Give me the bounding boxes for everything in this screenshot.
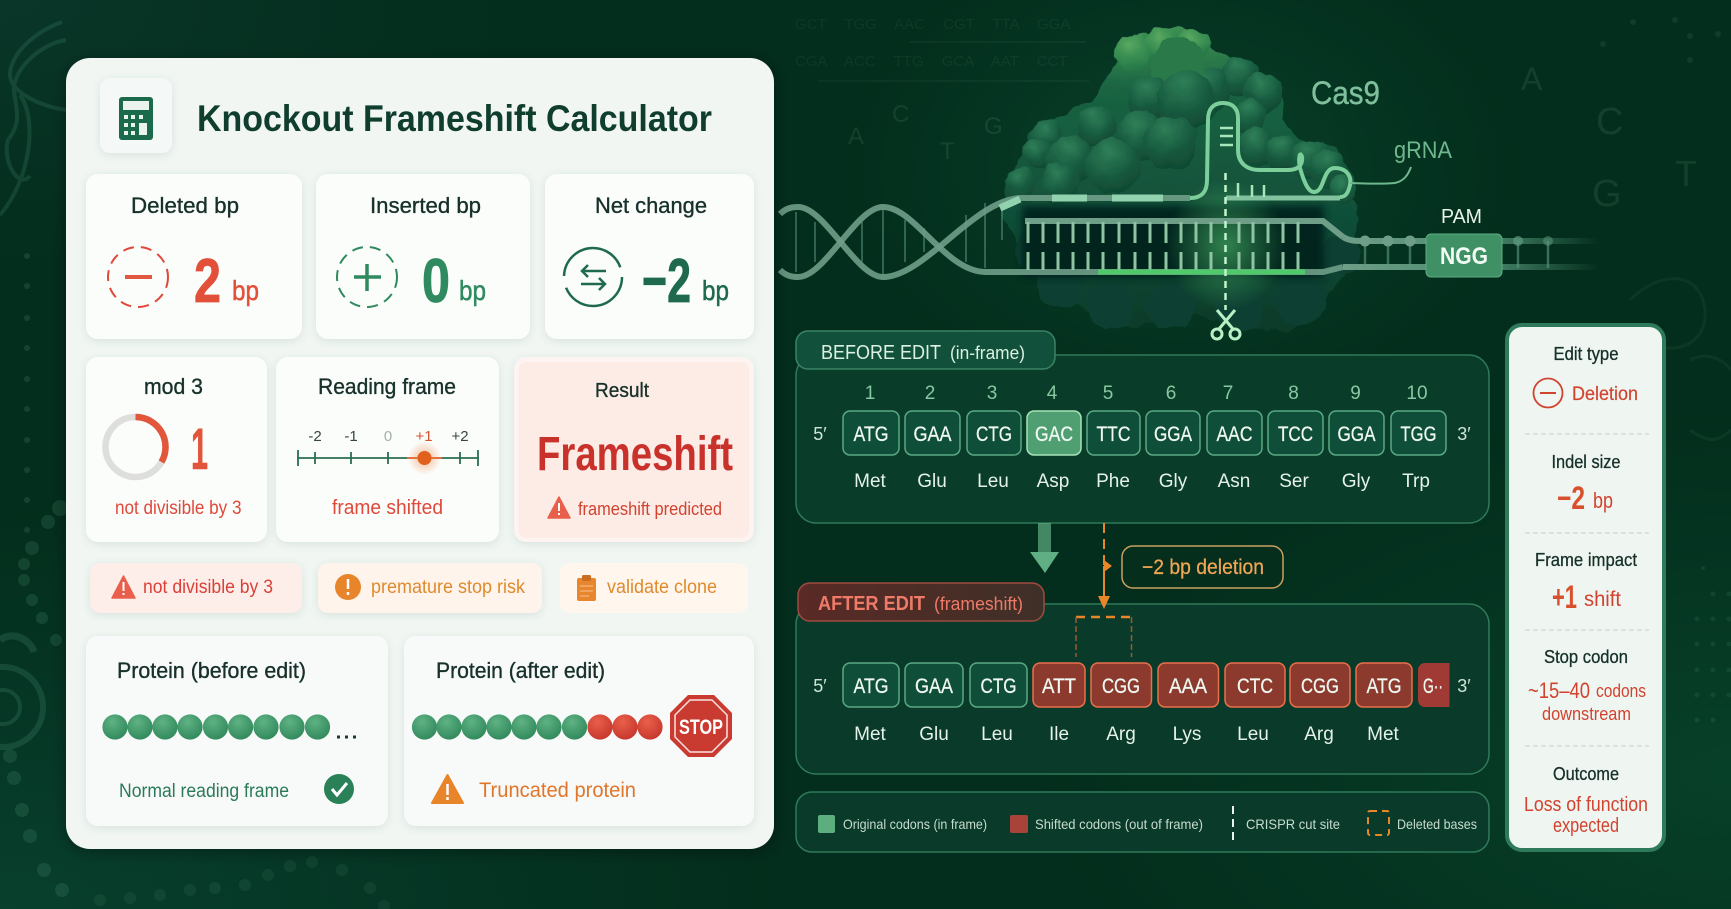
stop codon: ~15–40	[1528, 678, 1590, 703]
faint helix right	[1630, 279, 1731, 439]
codon numbers: 4	[1047, 383, 1058, 404]
amino acids: Leu	[977, 471, 1009, 492]
chip: not divisible by 3: not divisible by 3	[143, 577, 273, 598]
faint helix top left	[0, 22, 66, 215]
amino acids	[854, 724, 1400, 745]
panel: after edit	[796, 583, 1489, 774]
amino acids: Met	[854, 724, 887, 745]
panel: before edit: 5′	[813, 424, 827, 444]
codon numbers: 6	[1166, 383, 1176, 404]
card: result: Result	[595, 380, 649, 402]
stop codon: Stop codon	[1544, 647, 1628, 667]
base pair rungs	[1028, 222, 1298, 270]
card: deleted bp: Deleted bp	[131, 193, 239, 218]
arrow: before to after	[1030, 523, 1059, 573]
card: deleted bp	[86, 174, 302, 339]
card: result	[514, 357, 754, 542]
shifted codons key: Shifted codons (out of frame)	[1035, 816, 1203, 832]
original codons key	[818, 815, 987, 833]
cut site key	[1233, 806, 1340, 840]
codon numbers: 5	[1103, 383, 1113, 404]
background codon text: C	[1596, 101, 1623, 143]
amino acids: Arg	[1106, 724, 1136, 745]
background codon text: G	[1592, 173, 1622, 215]
card: reading frame: -1	[344, 428, 358, 445]
card: protein after edit: Truncated protein	[479, 779, 636, 802]
amino acids: Arg	[1304, 724, 1334, 745]
deleted bases marker	[1076, 617, 1132, 657]
codon numbers: 7	[1223, 383, 1233, 404]
codon row	[843, 411, 1446, 455]
codon row: GAA	[914, 423, 952, 446]
outcome: expected	[1553, 815, 1619, 837]
codon row: GGA	[1338, 423, 1376, 446]
right upper strand	[1226, 196, 1340, 200]
faint bead wave bottom	[94, 856, 390, 909]
card: net change: Net change	[595, 193, 707, 218]
codon numbers: 9	[1350, 383, 1361, 404]
tab: after edit: (frameshift)	[934, 594, 1023, 614]
card: inserted bp: 0	[422, 247, 450, 316]
gRNA	[1190, 103, 1411, 198]
deleted bases key: Deleted bases	[1397, 816, 1477, 832]
codon row: CTG	[980, 675, 1016, 698]
card: inserted bp	[316, 174, 530, 339]
legend	[796, 792, 1489, 852]
amino acids: Lys	[1173, 724, 1201, 745]
codon numbers: 1	[865, 383, 875, 404]
card: reading frame	[276, 357, 499, 542]
stop codon: downstream	[1542, 704, 1631, 724]
amino acids: Ile	[1049, 724, 1069, 745]
indel size: bp	[1593, 488, 1613, 513]
helix rungs	[796, 200, 1002, 274]
amino acids: Phe	[1096, 471, 1130, 492]
codon row: G··	[1423, 675, 1443, 698]
background codon text: A	[1521, 61, 1543, 97]
beads	[412, 714, 663, 740]
icon: stop sign: STOP	[679, 716, 723, 739]
tab: before edit: BEFORE EDIT	[821, 342, 941, 364]
outcome: Outcome	[1553, 764, 1619, 784]
codon row: CGG	[1102, 675, 1140, 698]
label: gRNA: gRNA	[1394, 137, 1452, 164]
amino acids: Glu	[917, 471, 947, 492]
left strand B and lower strand	[780, 207, 1343, 277]
background codon text	[795, 16, 1697, 215]
background codon text: A	[848, 123, 864, 150]
callout: -2 bp deletion	[1122, 546, 1283, 588]
PAM box NGG: NGG	[1440, 243, 1488, 270]
Cas9 protein	[1003, 27, 1360, 333]
codon row: TCC	[1278, 423, 1313, 446]
title: Knockout Frameshift Calculator	[197, 98, 712, 139]
codon row: GAC	[1035, 423, 1073, 446]
label: PAM: PAM	[1441, 206, 1482, 228]
card: reading frame: Reading frame	[318, 374, 456, 399]
arrow: deletion site	[1098, 523, 1112, 609]
card: reading frame: 0	[384, 428, 392, 445]
label: Cas9: Cas9	[1311, 75, 1380, 111]
amino acids: Gly	[1159, 471, 1188, 492]
card: reading frame: +2	[451, 428, 469, 445]
chip: validate clone	[560, 563, 748, 613]
right stem rungs	[1365, 241, 1548, 268]
deleted bases key	[1368, 811, 1477, 835]
panel: after edit: 3′	[1457, 676, 1471, 696]
card: mod 3: mod 3	[144, 374, 203, 399]
card: result: frameshift predicted	[578, 499, 722, 519]
codon numbers	[865, 383, 1428, 404]
background codon text: G	[984, 113, 1003, 140]
icon: scissors	[1212, 310, 1240, 339]
background codon text: C	[892, 101, 909, 128]
frame impact: shift	[1584, 588, 1621, 611]
amino acids: Asn	[1218, 471, 1250, 492]
stop codon: codons	[1596, 681, 1646, 701]
codon numbers: 10	[1406, 383, 1428, 404]
codon row: ATT	[1042, 675, 1076, 698]
card: protein after edit: Protein (after edit)	[436, 658, 605, 683]
amino acids: Ser	[1279, 471, 1309, 492]
DNA duplex with Cas9 bubble	[780, 180, 1600, 310]
amino acids	[854, 471, 1430, 492]
background codon text: T	[940, 138, 955, 165]
panel: edit summary	[1507, 325, 1664, 850]
amino acids: Gly	[1342, 471, 1371, 492]
icon: warning	[548, 497, 570, 518]
tab: after edit: AFTER EDIT	[818, 593, 925, 615]
card: protein before edit: Protein (before edit)	[117, 658, 306, 683]
codon row: ATG	[854, 675, 888, 698]
codon row: GGA	[1154, 423, 1192, 446]
card: net change: bp	[702, 275, 729, 306]
bright highlighted strand	[1098, 270, 1305, 274]
background codon text: GCT TGG AAC CGT TTA GGA	[795, 16, 1070, 33]
frame impact: +1	[1552, 579, 1577, 615]
codon numbers: 8	[1288, 383, 1299, 404]
panel: after edit: 5′	[813, 676, 827, 696]
faint dot column	[24, 253, 30, 533]
codon row: CGG	[1301, 675, 1339, 698]
codon row: ATG	[1366, 675, 1402, 698]
outcome: Loss of function	[1524, 794, 1648, 816]
card: net change: −2	[642, 247, 691, 316]
amino acids: Glu	[919, 724, 949, 745]
icon: stop sign	[670, 695, 732, 757]
codon row: GAA	[915, 675, 953, 698]
codon numbers: 3	[987, 383, 997, 404]
card: inserted bp: bp	[459, 275, 486, 306]
codon numbers: 2	[925, 383, 935, 404]
codon row: CTG	[976, 423, 1012, 446]
edit type	[1534, 344, 1638, 408]
amino acids: Leu	[1237, 724, 1269, 745]
amino acids: Asp	[1037, 471, 1069, 492]
amino acids: Trp	[1402, 471, 1430, 492]
cut site key: CRISPR cut site	[1246, 816, 1340, 832]
faint dots right	[1600, 17, 1731, 722]
card: protein after edit	[404, 636, 754, 826]
indel size: −2	[1557, 480, 1585, 516]
codon row: AAC	[1216, 423, 1252, 446]
card: mod 3: 1	[191, 417, 208, 482]
faint circle left	[0, 636, 43, 747]
card: reading frame: frame shifted	[332, 497, 443, 519]
panel: before edit: 3′	[1457, 424, 1471, 444]
chip: not divisible by 3	[90, 563, 302, 613]
background codon text: T	[1675, 153, 1697, 194]
codon row: TTC	[1096, 423, 1130, 446]
card: protein before edit: Normal reading frame	[119, 781, 289, 802]
chip: premature stop risk: premature stop risk	[371, 577, 525, 598]
icon: warning	[432, 775, 463, 803]
original codons key: Original codons (in frame)	[843, 816, 987, 832]
tab: after edit	[798, 583, 1044, 621]
card: reading frame: -2	[308, 428, 322, 445]
upper strand highlights	[1000, 198, 1163, 208]
cut line	[1224, 173, 1227, 310]
chip: premature stop risk	[318, 563, 542, 613]
codon row: TGG	[1400, 423, 1436, 446]
faint bead chain left	[3, 500, 69, 897]
inner target strand	[1025, 221, 1343, 237]
card: protein before edit	[86, 636, 388, 826]
card: net change	[545, 174, 754, 339]
card: reading frame: +1	[415, 428, 433, 445]
background codon text: CGA ACC TTG GCA AAT CCT	[795, 53, 1068, 70]
indel size: Indel size	[1552, 452, 1620, 472]
frame impact: Frame impact	[1535, 550, 1637, 570]
frame impact	[1535, 550, 1637, 615]
chip: validate clone: validate clone	[607, 577, 717, 598]
card: inserted bp: Inserted bp	[370, 193, 481, 218]
amino acids: Met	[854, 471, 887, 492]
icon: calculator	[100, 78, 172, 153]
card: mod 3	[86, 357, 267, 542]
amino acids: Met	[1367, 724, 1400, 745]
edit type: Edit type	[1554, 344, 1618, 364]
outcome	[1524, 764, 1648, 837]
edit type: Deletion	[1572, 384, 1638, 405]
PAM box NGG	[1426, 234, 1502, 277]
tab: before edit	[796, 331, 1055, 369]
card: result: Frameshift	[537, 428, 733, 481]
card: mod 3: not divisible by 3	[115, 498, 242, 519]
right lower strand	[1343, 264, 1600, 270]
indel size	[1552, 452, 1620, 516]
codon row: CTC	[1237, 675, 1273, 698]
amino acids: Leu	[981, 724, 1013, 745]
codon row	[843, 663, 1450, 707]
beads	[102, 714, 330, 740]
stop codon	[1528, 647, 1646, 724]
card: deleted bp: bp	[232, 275, 259, 306]
panel: before edit	[796, 331, 1489, 523]
left strand A	[780, 198, 1190, 277]
right inner strand	[1343, 237, 1600, 241]
panel: calculator	[66, 58, 774, 849]
callout: -2 bp deletion: −2 bp deletion	[1142, 556, 1264, 579]
tab: before edit: (in-frame)	[950, 343, 1025, 363]
codon row: ATG	[854, 423, 888, 446]
codon row: AAA	[1169, 675, 1207, 698]
card: deleted bp: 2	[194, 247, 221, 316]
